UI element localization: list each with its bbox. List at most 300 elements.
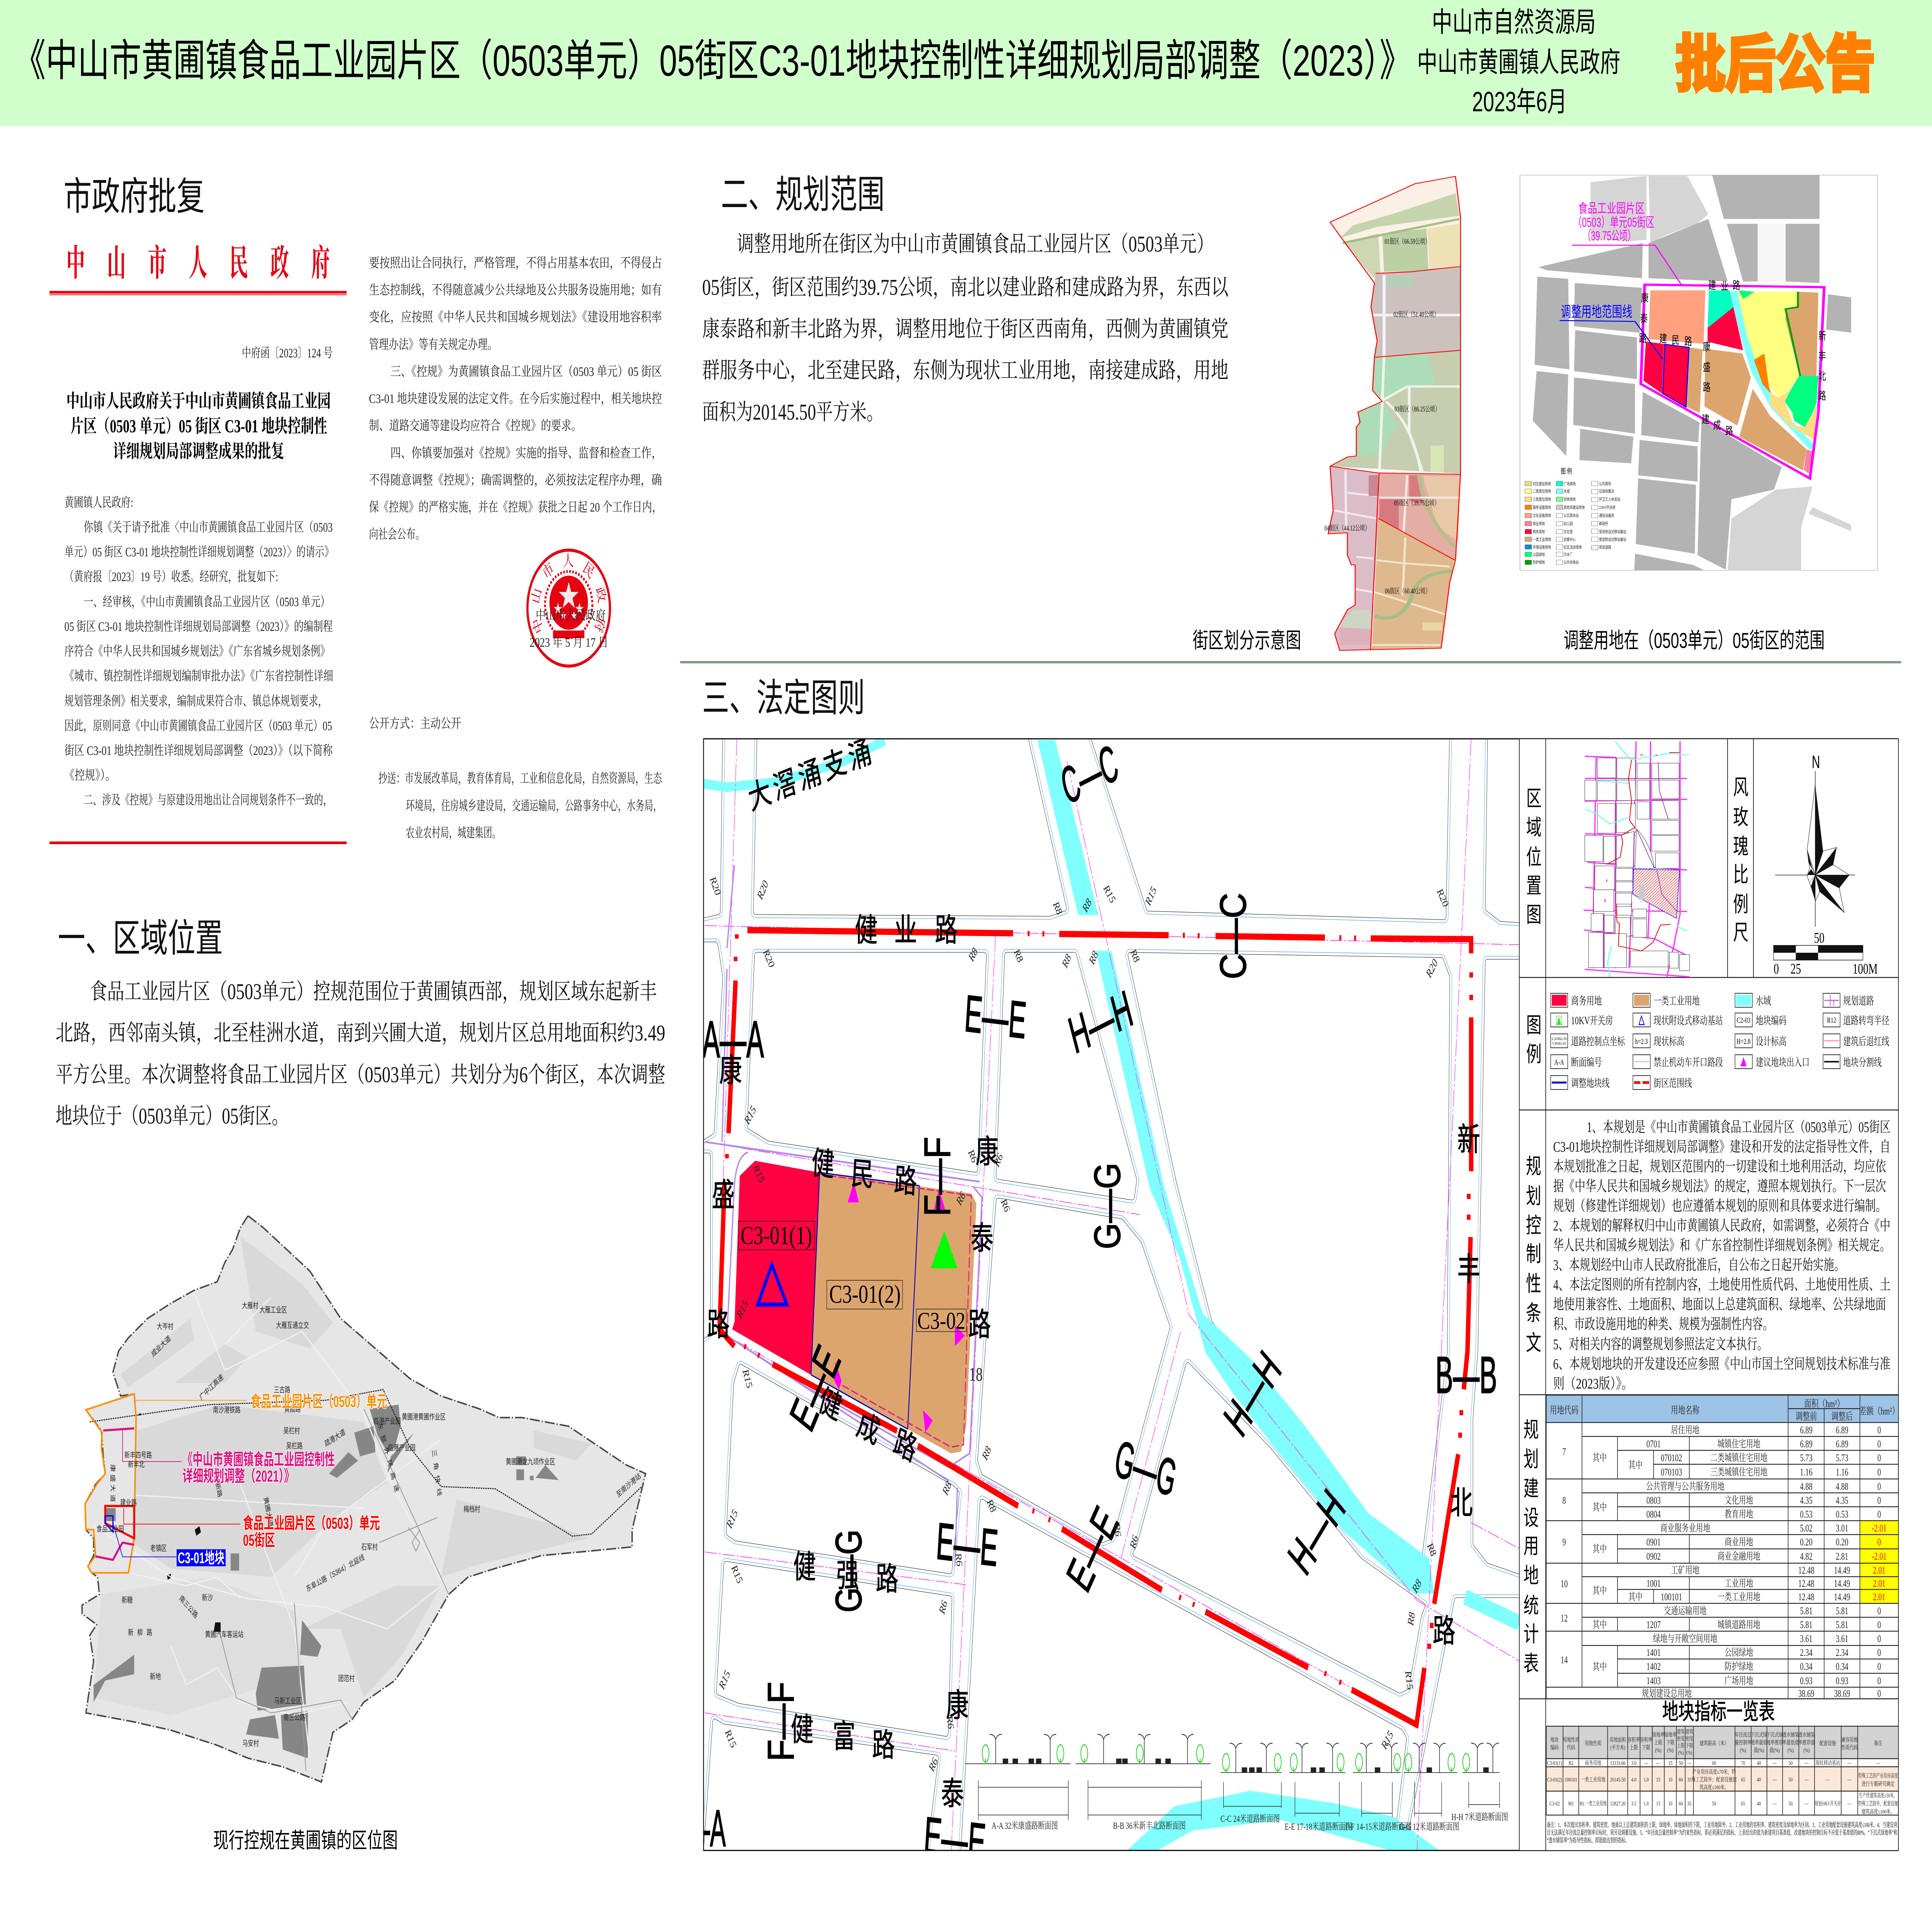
road labels: 北 (1450, 1486, 1473, 1521)
corner radius labels: R8 (1128, 946, 1142, 965)
map legend text: 社区活动场地 (1564, 545, 1582, 550)
heading: regional location: 一、区域位置 (58, 917, 223, 960)
indicator table header: 备注 (1874, 1740, 1882, 1746)
indicator row C3-01(1): — (1644, 1759, 1648, 1766)
corner radius labels: R15 (735, 1297, 750, 1321)
indicator row C3-01(2): 产业用房高度≤70米，特 (1692, 1768, 1736, 1776)
map legend text: 商业用地 (1533, 521, 1545, 526)
planning control provisions text: 4、本法定图则的所有控制内容，土地使用性质代码、土地使用性质、土 (1553, 1277, 1890, 1293)
approval body left column: （黄府报〔2023〕19 号）收悉。经研究，批复如下: (65, 569, 278, 584)
label: wind rose and scale: 比 (1733, 863, 1748, 887)
indicator table header: 下限 (1642, 1744, 1650, 1751)
approval body right column: 要按照出让合同执行，严格管理，不得占用基本农田，不得侵占 (369, 256, 662, 270)
table values after: 14.49 (1834, 1591, 1850, 1603)
table values before: 5.81 (1800, 1619, 1813, 1630)
table names and codes: 绿地与开敞空间用地 (1653, 1633, 1718, 1644)
approval body right column: 管理办法》等有关规定办理。 (369, 337, 497, 352)
map place labels: 吴栏路 (286, 1441, 303, 1450)
black markers (137, 1413, 221, 1632)
indicator row C3-02: 12827.20 (1610, 1800, 1626, 1807)
table left codes: 其中 (1592, 1452, 1607, 1463)
blue plot boundary (1663, 344, 1689, 407)
map legend text: 规划道路 (1599, 545, 1611, 550)
red rule (49, 291, 347, 295)
table differences: 0 (1878, 1619, 1881, 1630)
indicator row C3-01(2): — (1847, 1776, 1852, 1783)
approval body left column: 街区 C3-01 地块控制性详细规划局部调整（2023）》（以下简称 (65, 743, 333, 758)
road labels: 盛 (712, 1178, 735, 1213)
table values before: 4.82 (1800, 1551, 1813, 1562)
label: legend: 图 (1526, 1013, 1542, 1038)
indicator row C3-02: C3-02 (1549, 1800, 1560, 1807)
map legend text: 幼儿园 (1564, 521, 1573, 526)
map place labels: 南三公路 (178, 1593, 199, 1620)
approval body right column: 生态控制线，不得随意减少公共绿地及公共服务设施用地；如有 (369, 283, 662, 297)
indicator table header: 地块 (1550, 1736, 1559, 1743)
road labels: 健 (811, 1145, 835, 1183)
paragraph: regional location: 平方公里。本次调整将食品工业园片区（0503单元）共划分为6个街区，本次调整 (56, 1062, 665, 1087)
indicator table header: 绿地率 (1652, 1731, 1665, 1738)
table differences: 0 (1878, 1481, 1881, 1492)
paragraph: regional location: 食品工业园片区（0503单元）控规范围位于黄圃镇西部，规划区域东起新丰 (90, 979, 657, 1004)
map legend text: 商务用地 (1533, 529, 1545, 534)
callout: 2021 plan (182, 1450, 335, 1485)
corner radius labels: R20 (1435, 886, 1451, 909)
callout: block 05 name: （39.75公顷） (1583, 229, 1636, 243)
indicator row C3-02: 50 (1789, 1800, 1793, 1807)
road labels: 成 (853, 1407, 883, 1451)
table left codes: 12 (1561, 1613, 1568, 1624)
corner radius labels: 18 (969, 1364, 983, 1385)
indicator row C3-01(2): 15 (1656, 1776, 1660, 1783)
callout: block 05: 食品工业园片区（0503）单元 (243, 1514, 380, 1532)
map place labels: 三古路 (274, 1385, 290, 1394)
map legend text: 防护绿地 (1533, 560, 1545, 565)
table differences: 0 (1878, 1537, 1881, 1548)
map legend text: 广场用地 (1564, 481, 1576, 486)
legend text: 设计标高 (1756, 1036, 1786, 1048)
road labels: 健 (815, 1382, 845, 1427)
map road labels: 建 (1708, 280, 1716, 292)
indicator table header: 上限 (1677, 1742, 1685, 1749)
table names and codes: 公园绿地 (1725, 1647, 1753, 1658)
callout: block 05 name: 食品工业园片区 (1578, 201, 1645, 216)
approval title: 片区（0503 单元）05 街区 C3-01 地块控制性 (70, 416, 327, 437)
table header: 用地名称 (1671, 1405, 1700, 1416)
map road labels: 丰 (1818, 350, 1826, 362)
indicator row C3-01(2): 20145.50 (1610, 1776, 1626, 1783)
paragraph: planning scope: 群服务中心，北至建民路，东侧为现状工业用地，南接建成路，用地 (702, 358, 1228, 383)
planning control provisions text: 3、本规划经中山市人民政府批准后，自公布之日起开始实施。 (1553, 1257, 1845, 1273)
indicator table header: 量控制率 (1735, 1739, 1751, 1746)
label: planning control provisions: 性 (1526, 1272, 1541, 1296)
icon: 10KV switch room (930, 1231, 957, 1268)
legend icon codes: A-A (1554, 1058, 1564, 1067)
section markers: F—F (917, 1137, 958, 1216)
table differences: 0 (1878, 1647, 1881, 1658)
table values before: 6.89 (1800, 1424, 1813, 1436)
approval body right column: C3-01 地块建设发展的法定文件。在今后实施过程中，相关地块控 (369, 391, 662, 406)
label: land use statistics: 统 (1524, 1594, 1539, 1618)
indicator row C3-02: — (1772, 1800, 1777, 1807)
table values before: 3.61 (1800, 1633, 1813, 1644)
section markers: G—G (828, 1530, 869, 1613)
scale bar: 100M (1853, 961, 1878, 977)
indicator table header: (%) (1678, 1749, 1684, 1756)
callout: block 05 name (1573, 201, 1655, 243)
indicator row C3-01(1): 13133.66 (1610, 1759, 1626, 1766)
indicator table header: 密度 (1677, 1735, 1685, 1742)
label: planning control provisions: 文 (1526, 1331, 1541, 1355)
approval body right column: 不得随意调整《控规》；确需调整的，必须按法定程序办理，确 (369, 473, 662, 488)
table left codes: 其中 (1592, 1661, 1607, 1673)
corner radius labels: R15 (741, 1367, 754, 1390)
label: land use statistics: 划 (1524, 1447, 1539, 1472)
paragraph: regional location (56, 979, 665, 1129)
indicator row C3-01(2): — (1804, 1776, 1809, 1783)
caption: block division: 街区划分示意图 (1193, 629, 1301, 653)
label: planning control provisions: 制 (1526, 1242, 1541, 1266)
table left codes: 其中 (1592, 1543, 1607, 1555)
legend text: 断面编号 (1571, 1057, 1602, 1069)
indicator table header: 绿地率 (1664, 1731, 1677, 1738)
block labels: 04街区（44.12公顷） (1324, 524, 1370, 532)
indicator row C3-01(1): B2 (1569, 1759, 1573, 1766)
corner radius labels: R6 (1128, 1533, 1140, 1551)
approval title: 中山市人民政府关于中山市黄圃镇食品工业园 (66, 391, 331, 412)
table differences: -2.01 (1872, 1523, 1887, 1534)
disclosure method: 公开方式：主动公开 (369, 716, 461, 731)
land use polygons (1643, 291, 1818, 474)
indicator row C3-01(2): 筑高度≤100米。 (1699, 1784, 1729, 1790)
scale bar: 25 (1791, 961, 1801, 977)
table values before: 5.73 (1800, 1452, 1813, 1463)
map frame border (704, 739, 1897, 1851)
corner radius labels: R15 (717, 1668, 732, 1692)
table values before: 0.20 (1800, 1537, 1813, 1548)
plot label C3-01(2): C3-01(2) (829, 1280, 901, 1309)
label: wind rose and scale: 瑰 (1733, 835, 1748, 859)
map place labels: 东部外环高速 (376, 1421, 401, 1498)
approval body left column: 因此，原则同意《中山市黄圃镇食品工业园片区（0503 单元）05 (65, 719, 332, 733)
corner radius labels: R8 (980, 1444, 993, 1463)
table values after: 2.81 (1836, 1551, 1848, 1562)
map road labels: 路 (1733, 280, 1740, 292)
indicator row C3-01(2): 60 (1679, 1776, 1683, 1783)
legend text: 街区范围线 (1653, 1078, 1692, 1090)
official seal: 中山市人民政府 (529, 552, 608, 636)
panel: municipal approval (49, 175, 662, 844)
corner radius labels: R8 (1087, 948, 1100, 967)
map road labels: 新 (1818, 330, 1826, 342)
map place labels: 新糖 (122, 1596, 133, 1605)
label: planning control provisions: 划 (1526, 1184, 1541, 1209)
label: wind rose and scale: 风 (1733, 775, 1748, 800)
indicator row C3-01(2): 10 (1668, 1776, 1673, 1783)
map place labels: 三角快线 (431, 1449, 444, 1502)
section markers: H—H (1280, 1479, 1353, 1585)
label: land use statistics (1524, 1418, 1539, 1676)
callout: adjustment boundary: 调整用地范围线 (1561, 303, 1633, 320)
legend icon codes: Y 493463.435 (1552, 1042, 1566, 1045)
corner radius labels: R6 (927, 1755, 940, 1774)
block labels (1324, 237, 1440, 595)
table values before: 0.34 (1800, 1661, 1813, 1672)
corner radius labels: R8 (1012, 946, 1025, 965)
map place labels: 临港产业园 (373, 1417, 401, 1426)
map place labels: 成业大道 (150, 1334, 172, 1359)
road labels: 新 (1458, 1122, 1480, 1158)
column gridlines (1519, 739, 1898, 1851)
heading: statutory plan: 三、法定图则 (702, 676, 865, 720)
table values after: 14.49 (1834, 1578, 1850, 1589)
section markers: A—A (702, 1010, 764, 1068)
table values after: 3.01 (1836, 1523, 1848, 1534)
map place labels: 康盛大道 (110, 1464, 116, 1504)
scale bar (1774, 930, 1878, 977)
corner radius labels: R6 (937, 1598, 949, 1616)
stamp: post-approval notice: 批后公告 (1675, 30, 1875, 99)
land zones (94, 1236, 592, 1715)
corner radius labels: R20 (1424, 956, 1440, 981)
table differences: 2.01 (1873, 1578, 1885, 1589)
map legend text: 现状附设式移动基站 (1599, 529, 1626, 534)
road labels: 丰 (1458, 1252, 1480, 1287)
indicator row C3-02: 3.5 (1631, 1800, 1636, 1807)
map place labels: 老镇区 (150, 1544, 167, 1553)
legend icon codes: H=2.8 (1736, 1037, 1751, 1046)
indicator row C3-01(1) (1547, 1759, 1881, 1766)
indicator table header: (%) (1787, 1747, 1794, 1753)
built-up dark blocks (94, 1405, 559, 1758)
indicator row C3-01(2): 65 (1741, 1776, 1745, 1783)
corner radius labels: R15 (1403, 1669, 1415, 1691)
bottom red rule (49, 841, 347, 844)
table names and codes: 居住用地 (1671, 1424, 1699, 1436)
planning control provisions text: 则（2023版）》。 (1553, 1376, 1633, 1392)
white roads and rivers (94, 1293, 449, 1758)
section markers: E—E (922, 1806, 987, 1871)
map legend text: 二类居住用地 (1533, 489, 1551, 494)
corner radius labels: R20 (761, 946, 777, 970)
table differences: 2.01 (1873, 1565, 1885, 1576)
planning control provisions text: 1、本规划是《中山市黄圃镇食品工业园片区（0503单元）05街区 (1587, 1119, 1890, 1135)
cross-section C-C: C-C 24米道路断面图 (1221, 1814, 1280, 1824)
white column background (1519, 739, 1898, 1851)
block labels: 05街区（39.75公顷） (1394, 499, 1439, 507)
map legend text: 其他非建设用地 (1564, 505, 1585, 510)
table differences: 0 (1878, 1495, 1881, 1506)
section markers: G—G (1087, 1163, 1128, 1249)
indicator table header: 上限 (1654, 1739, 1662, 1746)
map place labels: 临港产业园 (388, 1443, 415, 1452)
divider (680, 661, 1901, 663)
table names and codes: 0902 (1646, 1551, 1661, 1562)
indicator table footnote: “透水铺装率”为指导性指标，即鼓励达到的指标。 (1547, 1836, 1629, 1844)
icons: access points (834, 1182, 965, 1433)
indicator table header: 下限 (1666, 1739, 1675, 1746)
corner radius labels: R6 (966, 1146, 980, 1165)
indicator row C3-01(2): 1.0 (1644, 1776, 1649, 1783)
planning control provisions text: C3-01地块控制性详细规划局部调整》建设和开发的法定指导性文件，自 (1553, 1139, 1890, 1155)
approval title (66, 391, 331, 462)
block labels: 03街区（86.25公顷） (1395, 405, 1440, 413)
label: legend: 例 (1526, 1042, 1542, 1067)
map legend text: 规划附设式移动基站 (1599, 537, 1626, 542)
road labels: 康 (976, 1134, 998, 1170)
table values before: 0.53 (1800, 1509, 1813, 1520)
indicator row C3-02: 65 (1741, 1800, 1745, 1807)
map road labels: 北 (1818, 371, 1826, 382)
table names and codes (1642, 1424, 1767, 1699)
legend (1551, 993, 1889, 1090)
plot label C3-02: C3-02 (917, 1307, 965, 1334)
map place labels: 南沙港铁路 (213, 1406, 240, 1414)
road centerlines (705, 739, 1519, 1851)
corner radius labels (708, 874, 1451, 1774)
heading: plot indicators: 地块指标一览表 (1662, 1699, 1775, 1724)
table grid (1546, 1395, 1898, 1699)
road labels: 泰 (941, 1776, 964, 1812)
map legend swatches (1525, 481, 1598, 564)
map place labels: 食品工业园 (97, 1525, 124, 1533)
road labels: 路 (893, 1163, 918, 1200)
section markers (686, 733, 1497, 1871)
table values after: 0.20 (1836, 1537, 1848, 1548)
table header: 面积（hm²） (1804, 1398, 1844, 1409)
paragraph: regional location: 地块位于（0503单元）05街区。 (56, 1103, 288, 1129)
map place labels: 南三公路 (283, 1713, 305, 1722)
table header: 用地代码 (1550, 1405, 1578, 1416)
map place labels: 大雁工业区 (259, 1305, 287, 1314)
map place labels: 梅档村 (464, 1505, 480, 1514)
map legend text: 公交首末站 (1564, 513, 1579, 518)
map legend text: 三类居住用地 (1533, 497, 1551, 502)
road labels: 康 (719, 1053, 742, 1088)
issue date: 2023年6月 (1472, 86, 1567, 117)
legend text: 地块分割线 (1843, 1057, 1882, 1069)
map road labels: 康 (1641, 292, 1649, 304)
table names and codes: 工业用地 (1725, 1578, 1753, 1589)
indicator table header: 用地性质 (1585, 1740, 1601, 1746)
indicator table header: 容积率 (1628, 1736, 1640, 1743)
paragraph: regional location: 北路，西邻南头镇，北至桂洲水道，南到兴圃大道，规划片区总用地面积约3.49 (56, 1020, 665, 1045)
indicator table grid (1546, 1726, 1898, 1815)
map legend text: 农林用地 (1564, 497, 1576, 502)
map road labels: 民 (1672, 335, 1679, 347)
indicator row C3-02: 50 (1712, 1800, 1716, 1807)
boundary: C3-01 (105, 1516, 113, 1532)
table values after: 38.69 (1834, 1688, 1850, 1699)
red block boundaries (1328, 177, 1461, 650)
legend icon codes (1551, 1016, 1836, 1067)
corner radius labels: R15 (1379, 1728, 1395, 1752)
map legend text: 会展中心 (1564, 537, 1576, 542)
indicator table header: 建筑 (1685, 1728, 1693, 1735)
indicator row C3-01(2): 殊工艺除外；配套设施建 (1691, 1776, 1737, 1783)
table values before: 12.48 (1798, 1578, 1814, 1589)
approval body left column: 《控规》）。 (65, 768, 116, 783)
callout: block 05: 05街区 (243, 1531, 275, 1549)
indicator table header: 透水铺装 (1798, 1731, 1815, 1738)
table names and codes: 1401 (1646, 1647, 1661, 1658)
legend icon codes: R12 (1827, 1016, 1836, 1025)
map place labels: 建业路 (120, 1498, 137, 1507)
panel: section 2 planning scope (702, 173, 1878, 653)
indicator row C3-02: 10 (1668, 1800, 1673, 1807)
map road labels: 成 (1713, 420, 1721, 432)
official seal: 中山市人民政府 (536, 608, 605, 623)
indicator row C3-01(1): — (1772, 1759, 1777, 1766)
map legend text: 环境设施用地 (1533, 545, 1551, 550)
label: wind rose and scale: 玫 (1733, 805, 1748, 829)
road labels: 民 (850, 1156, 875, 1193)
table differences (1872, 1424, 1887, 1699)
leader: adjustment boundary (1560, 321, 1663, 359)
section markers: E—E (935, 1511, 1000, 1577)
table names and codes: 0901 (1646, 1537, 1661, 1548)
corner radius labels: R6 (945, 1714, 956, 1730)
label: wind rose and scale: 尺 (1733, 921, 1748, 945)
label: location: 位 (1526, 845, 1542, 870)
plot label C3-01(1): C3-01(1) (740, 1221, 812, 1250)
table differences: 0 (1878, 1605, 1881, 1616)
paragraph: planning scope: 康泰路和新丰北路为界，调整用地位于街区西南角，西侧为黄圃镇党 (702, 316, 1228, 342)
indicator row C3-01(2): 一类工业用地 (1581, 1776, 1605, 1783)
table names and codes: 交通运输用地 (1664, 1605, 1707, 1616)
approval body left column: 你镇《关于请予批准〈中山市黄圃镇食品工业园片区（0503 (83, 520, 333, 535)
road labels: 泰 (971, 1221, 993, 1256)
map: Huangpu town location (82, 1216, 646, 1782)
map road labels: 路 (1725, 425, 1733, 437)
table names and codes: 广场用地 (1725, 1675, 1753, 1686)
table values before: 2.34 (1800, 1647, 1813, 1658)
indicator row C3-02 (1549, 1792, 1898, 1815)
indicator row C3-01(1): 商务用地 (1585, 1759, 1601, 1766)
label: location: 图 (1526, 903, 1542, 927)
magenta block boundary (1641, 285, 1824, 478)
legend text: 水域 (1756, 995, 1771, 1007)
planning control provisions text: 5、对相关内容的调整规划参照法定文本执行。 (1553, 1336, 1768, 1353)
table names and codes: 070102 (1661, 1452, 1682, 1463)
approval body left column: 05 街区 C3-01 地块控制性详细规划局部调整（2023）》的编制程 (65, 619, 333, 634)
table names and codes: 1207 (1646, 1619, 1661, 1630)
indicator row C3-02: M1 一类工业用地 (1580, 1800, 1607, 1807)
map legend text: 水域 (1564, 489, 1570, 494)
section markers: G—G (1111, 1429, 1181, 1508)
table differences: 0 (1878, 1424, 1881, 1436)
heading: planning scope: 二、规划范围 (721, 173, 884, 216)
legend text: 规划道路 (1843, 995, 1874, 1007)
official seal: 2023 年 5 月 17 日 (530, 635, 608, 650)
indicator row C3-02: 60 (1679, 1800, 1683, 1807)
table values before (1798, 1424, 1814, 1699)
planning control provisions text: 积、市政设施用地的种类、规模为强制性内容。 (1553, 1316, 1773, 1333)
label: land use statistics: 设 (1524, 1506, 1539, 1530)
label: land use statistics: 地 (1524, 1564, 1539, 1588)
map place labels: 黄圃汽车客运站 (205, 1630, 243, 1639)
indicator row C3-02: 建筑高度≤100米。 (1861, 1808, 1895, 1815)
legend text: 现状附设式移动基站 (1653, 1015, 1723, 1027)
indicator table header: 值(%) (1754, 1747, 1764, 1753)
table values after: 6.89 (1836, 1424, 1848, 1436)
light gray context (1590, 176, 1851, 570)
road labels: 路 (707, 1307, 730, 1343)
indicator row C3-01(1): 50 (1679, 1759, 1683, 1766)
map legend text: 环卫工人休息站 (1599, 497, 1621, 502)
indicator table header: 透水铺装 (1782, 1731, 1799, 1738)
table values after: 3.61 (1836, 1633, 1848, 1644)
